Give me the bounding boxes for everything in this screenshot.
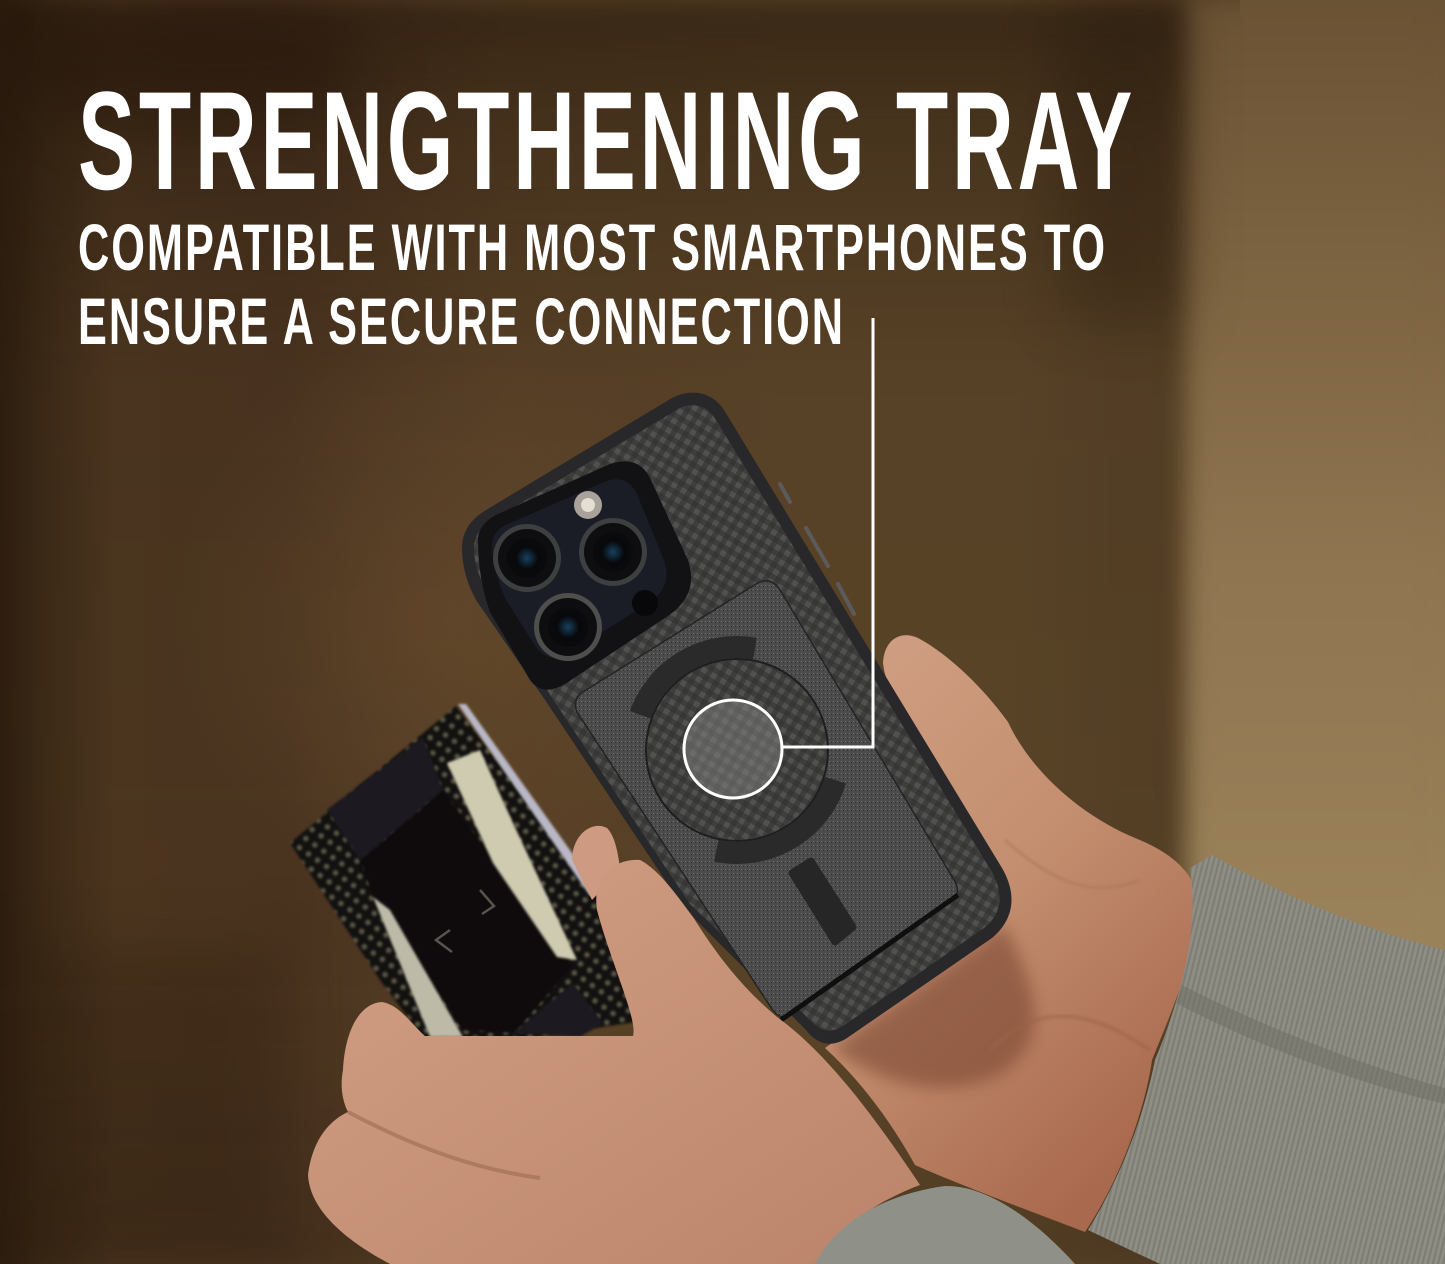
subtitle: ENSURE A SECURE CONNECTION xyxy=(78,284,845,358)
left hand in foreground xyxy=(308,826,920,1264)
wallet xyxy=(290,704,636,1042)
phone body xyxy=(462,393,1011,1044)
lens top right xyxy=(579,518,647,586)
callout line xyxy=(782,318,873,747)
side buttons xyxy=(780,484,854,614)
lens top left xyxy=(493,524,561,592)
index finger tip xyxy=(572,826,620,900)
lens bottom xyxy=(534,593,602,661)
right sleeve xyxy=(1088,855,1445,1264)
phone with carbon case xyxy=(462,393,1011,1044)
card stack edge xyxy=(458,704,597,896)
camera flash xyxy=(574,491,602,519)
tray lower shadow gap xyxy=(781,895,958,1020)
left sleeve xyxy=(815,1186,1075,1264)
camera bump xyxy=(478,461,691,690)
alignment slot xyxy=(792,861,853,942)
mount arc upper xyxy=(640,647,755,715)
cash note lower xyxy=(373,897,463,1037)
cash note upper xyxy=(447,750,577,960)
mount arc lower xyxy=(716,780,836,853)
centre carbon circle xyxy=(646,659,828,841)
elastic band upper xyxy=(327,737,443,860)
elastic band lower xyxy=(513,983,603,1037)
logo mark xyxy=(436,890,494,952)
subtitle xyxy=(78,210,1107,358)
metal clip xyxy=(360,790,573,1033)
callout window on tray xyxy=(680,696,786,802)
right hand behind phone xyxy=(825,635,1200,1232)
strengthening tray plate xyxy=(575,581,958,1020)
